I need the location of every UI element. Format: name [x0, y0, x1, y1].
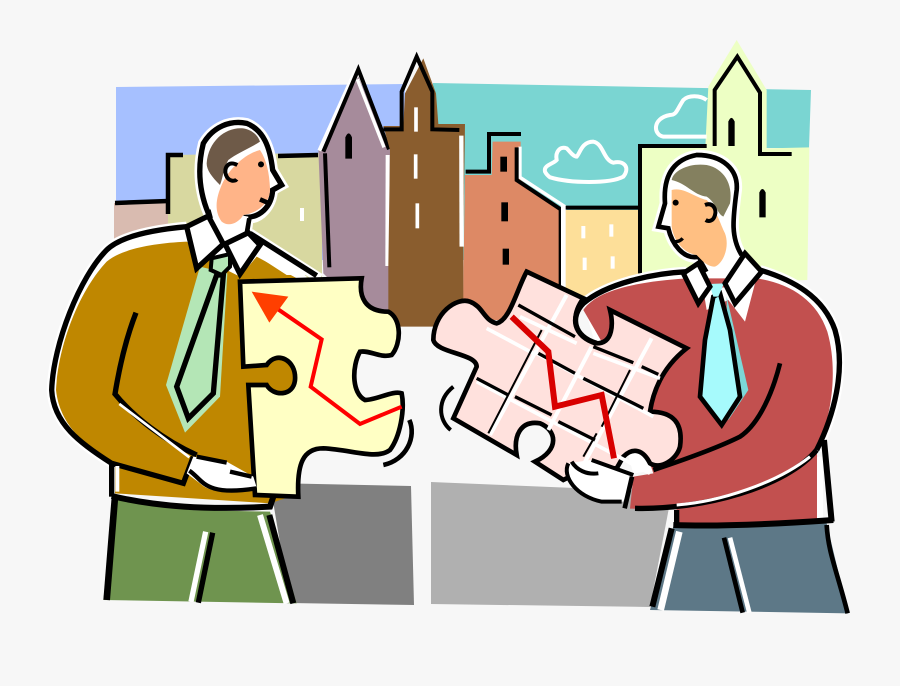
mouth	[260, 199, 271, 204]
right man: white side strip	[811, 457, 829, 518]
arrowhead	[252, 292, 288, 323]
building: salmon block	[463, 134, 565, 320]
right man: head and neck	[658, 155, 747, 287]
right man: sweater outlines	[576, 270, 839, 525]
cloud: small	[656, 96, 707, 137]
building: pink base	[114, 201, 172, 250]
skin	[672, 189, 727, 267]
right man: collar	[683, 253, 762, 303]
left man: sweater outlines	[52, 227, 317, 508]
buildings: center group	[318, 57, 565, 327]
right man: sweater halo	[583, 270, 839, 473]
hair	[207, 128, 260, 185]
ear	[705, 204, 715, 221]
eye	[673, 200, 679, 206]
ear	[225, 163, 237, 181]
hair	[672, 165, 731, 217]
mouth	[675, 238, 683, 242]
building: pale right tower	[640, 40, 809, 287]
buildings: right group	[545, 40, 809, 300]
left man: sweater halo	[52, 227, 320, 483]
left man: sweater fill	[56, 242, 300, 503]
right man	[433, 155, 839, 525]
building: khaki back left	[168, 153, 322, 300]
motion curve	[441, 387, 453, 430]
eye	[258, 161, 264, 167]
chart arrow: rising red line	[277, 308, 402, 424]
sky: teal right	[433, 83, 811, 260]
left man: collar	[187, 216, 260, 274]
right man: trousers	[650, 523, 848, 613]
left man: trousers	[103, 497, 297, 603]
puzzle piece: pink grid with chart	[433, 272, 687, 480]
skin	[217, 150, 270, 224]
motion curve	[383, 420, 412, 465]
left man	[52, 122, 412, 508]
cloud: large	[545, 142, 626, 182]
right man: hand	[567, 460, 633, 508]
right man: tie	[700, 283, 748, 425]
puzzle piece: yellow with chart	[240, 278, 412, 497]
left man: hand	[187, 457, 257, 492]
building: purple tower	[318, 69, 390, 317]
building: yellow block	[563, 205, 640, 300]
pavement: dark left	[270, 483, 414, 605]
grid lines	[477, 295, 660, 473]
chart: falling red line	[512, 317, 614, 458]
left man: head and neck	[200, 122, 282, 247]
right man: white under collar	[703, 283, 755, 322]
left man: tie	[166, 254, 230, 433]
right man: sweater fill	[583, 278, 833, 523]
building: brown tower	[383, 57, 465, 327]
pavement: light right	[431, 482, 672, 607]
sky: blue left	[116, 84, 405, 260]
shoulder white band	[258, 257, 317, 275]
